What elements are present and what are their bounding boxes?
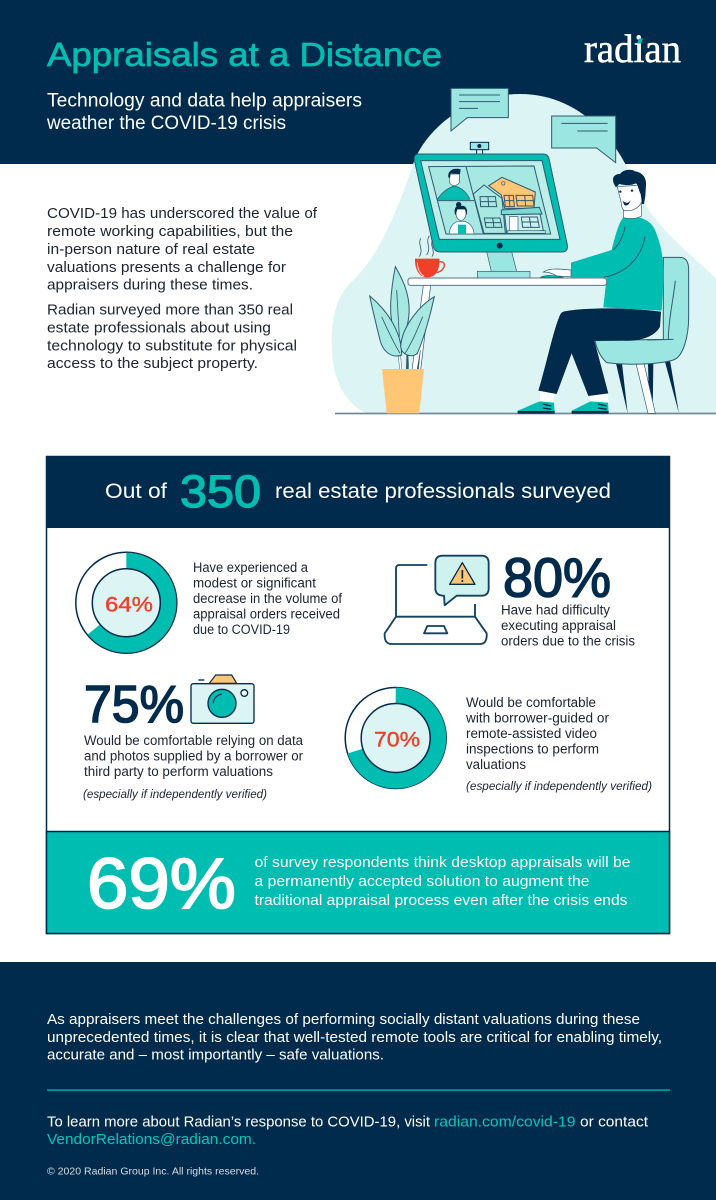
contact text: radian.com/covid-19	[434, 1114, 576, 1130]
desk leg	[412, 285, 431, 370]
stat: 64%: 64%	[105, 594, 153, 616]
illustration: person at video call	[332, 88, 716, 414]
stat: 64%	[76, 552, 342, 653]
stat: 64%: modest or significant	[193, 576, 316, 590]
callout: 69%: of survey respondents think desktop appraisals will be	[254, 854, 630, 871]
speech bubble right	[552, 116, 616, 163]
survey heading band: real estate professionals surveyed	[275, 480, 611, 503]
logo: radian: radian	[584, 26, 681, 71]
intro text: access to the subject property.	[47, 355, 258, 372]
stat: 70%: (especially if independently verified)	[466, 781, 652, 793]
intro text: estate professionals about using	[47, 320, 271, 336]
monitor stand	[487, 252, 517, 271]
blob background	[332, 94, 716, 413]
desk	[408, 278, 607, 285]
stat: 64%: Have experienced a	[193, 560, 308, 575]
floor line	[335, 413, 716, 414]
contact text: or contact	[580, 1114, 649, 1130]
stat: 75%: (especially if independently verified)	[83, 789, 267, 801]
stat: 70%: 70%	[374, 728, 420, 752]
steam	[419, 236, 433, 257]
conclusion text: accurate and – most importantly – safe valuations.	[47, 1046, 384, 1064]
intro text: remote working capabilities, but the	[47, 223, 293, 240]
stat: 64%: appraisal orders received	[193, 606, 340, 622]
stat: 70%: Would be comfortable	[466, 695, 596, 710]
stat: 80%	[385, 546, 635, 648]
stat: 75%: Would be comfortable relying on data	[84, 733, 303, 748]
contact text: To learn more about Radian’s response to COVID-19, visit	[47, 1114, 431, 1130]
intro text: Radian surveyed more than 350 real	[47, 302, 293, 318]
monitor	[414, 154, 567, 252]
sweater	[571, 217, 664, 311]
stat: 80%: Have had difficulty	[501, 602, 610, 618]
subtitle: Technology and data help appraisers	[47, 90, 362, 112]
survey panel	[46, 456, 670, 934]
copyright: © 2020 Radian Group Inc. All rights reserved.	[47, 1166, 259, 1178]
stat: 80%: executing appraisal	[501, 618, 616, 633]
stat: 70%	[345, 688, 652, 793]
house	[473, 177, 545, 233]
hair	[613, 170, 646, 204]
stat: 75%: and photos supplied by a borrower or	[84, 748, 303, 764]
stat: 70%: with borrower-guided or	[465, 710, 609, 726]
intro text: COVID-19 has underscored the value of	[47, 205, 318, 222]
header band	[0, 0, 716, 164]
stat: 75%: 75%	[84, 676, 184, 734]
hand and mouse	[541, 276, 563, 277]
conclusion text	[47, 1011, 662, 1064]
survey heading band: Out of	[105, 480, 167, 503]
stat: 75%	[83, 675, 303, 801]
webcam	[470, 142, 489, 154]
subtitle: weather the COVID-19 crisis	[46, 113, 286, 134]
contact text	[47, 1114, 649, 1148]
video tile: man	[437, 169, 470, 199]
plant	[370, 267, 434, 369]
flower pot	[382, 369, 424, 413]
contact text: VendorRelations@radian.com.	[47, 1131, 256, 1148]
video tile: woman	[449, 202, 474, 234]
footer panel	[0, 962, 716, 1200]
callout: 69%	[46, 832, 670, 934]
subtitle	[46, 90, 362, 134]
pants	[538, 308, 661, 396]
icon: laptop with warning	[385, 556, 489, 644]
speech bubble left	[451, 88, 508, 131]
person	[518, 170, 664, 414]
survey heading band: 350	[180, 466, 261, 517]
icon: camera	[191, 675, 254, 723]
intro text: valuations presents a challenge for	[47, 259, 286, 276]
stat: 70%: inspections to perform	[466, 742, 599, 756]
stat: 70%: remote-assisted video	[466, 726, 597, 741]
shoes	[518, 401, 555, 413]
callout: 69%: traditional appraisal process even after the crisis ends	[254, 892, 628, 909]
callout: 69%: 69%	[87, 845, 236, 924]
callout: 69%: a permanently accepted solution to augment the	[254, 873, 590, 890]
survey heading band	[46, 456, 670, 528]
intro text	[47, 205, 318, 372]
intro text: in-person nature of real estate	[47, 241, 255, 258]
stat: 64%: decrease in the volume of	[193, 591, 342, 606]
socks	[540, 391, 609, 403]
stat: 64%: due to COVID-19	[193, 622, 290, 637]
monitor base	[477, 271, 530, 278]
conclusion text: unprecedented times, it is clear that well-tested remote tools are critical for enabling timely,	[47, 1029, 662, 1046]
intro text: appraisers during these times.	[47, 276, 253, 294]
conclusion text: As appraisers meet the challenges of performing socially distant valuations during these	[47, 1011, 640, 1028]
stat: 70%: valuations	[466, 757, 526, 772]
chair	[595, 257, 689, 413]
neck and face	[623, 197, 642, 219]
intro text: technology to substitute for physical	[47, 338, 297, 354]
stat: 75%: third party to perform valuations	[84, 764, 273, 779]
title: Appraisals at a Distance	[47, 36, 442, 73]
stat: 80%: 80%	[503, 546, 611, 608]
stat: 80%: orders due to the crisis	[501, 634, 635, 648]
coffee cup	[415, 259, 444, 277]
